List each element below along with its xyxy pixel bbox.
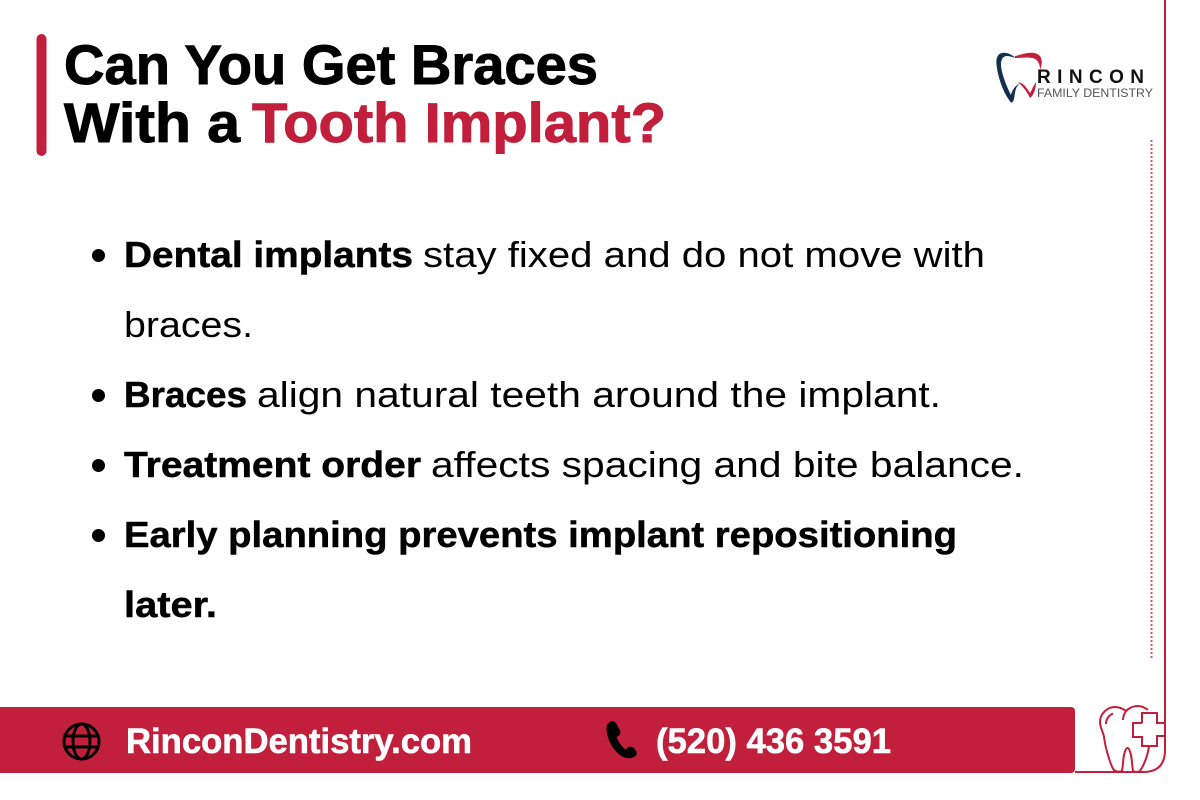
title: Can You Get Braces — [64, 33, 598, 96]
phone number: (520) 436 3591 — [656, 722, 891, 761]
website: RinconDentistry.com — [126, 722, 472, 761]
icon: tooth with cross — [1100, 706, 1165, 772]
dotted vertical rule — [1150, 140, 1152, 658]
title — [64, 33, 666, 154]
page border line — [1075, 0, 1165, 772]
bullet: braces: align natural teeth around the implant. — [257, 374, 941, 415]
icon: phone — [606, 721, 637, 758]
logo wordmark: RINCON — [1037, 67, 1144, 88]
logo tagline: FAMILY DENTISTRY — [1037, 86, 1153, 100]
bullet: treatment order — [92, 444, 1024, 485]
bullet: treatment order: affects spacing and bite balance. — [431, 444, 1024, 485]
title: With a — [64, 91, 241, 154]
bullet: dental implants: Dental implants — [124, 234, 413, 275]
bullet: early planning: Early planning prevents implant repositioning — [124, 514, 957, 555]
bullet: treatment order: Treatment order — [124, 444, 421, 485]
bullet list — [92, 234, 1024, 625]
title: Tooth Implant? — [252, 91, 666, 154]
bullet: braces: Braces — [124, 374, 247, 415]
logo: Rincon Family Dentistry — [996, 53, 1153, 103]
icon: logo tooth — [996, 53, 1042, 103]
bullet: dental implants — [92, 234, 985, 345]
bullet: dental implants: braces. — [124, 304, 253, 345]
bullet: early planning — [92, 514, 957, 625]
footer bar — [0, 707, 1075, 773]
bullet: early planning: later. — [124, 584, 217, 625]
title accent bar — [36, 34, 46, 156]
icon: globe — [64, 724, 99, 759]
bullet: dental implants: stay fixed and do not move with — [423, 234, 985, 275]
